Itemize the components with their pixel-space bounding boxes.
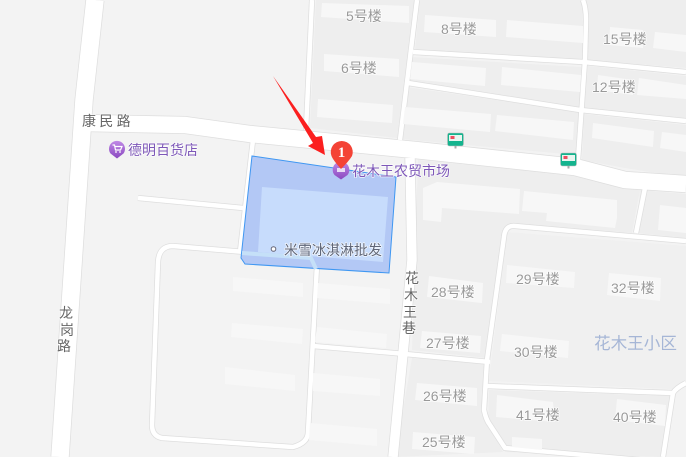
icon: shopping cart pin: [109, 141, 125, 158]
poi: 米雪冰淇淋批发: [271, 242, 382, 258]
building number labels: 12号楼: [592, 79, 636, 95]
bus stop icons: [448, 133, 576, 168]
label: 龙岗路: 路: [57, 338, 71, 354]
inner building: [258, 187, 388, 262]
highlighted market area: [241, 156, 396, 273]
building number labels: [341, 8, 657, 450]
label: 康民路: 康民路: [82, 113, 134, 129]
red location pin: [331, 141, 353, 169]
label: 龙岗路: [57, 305, 74, 354]
buildings: [225, 3, 686, 454]
building number labels: 27号楼: [426, 335, 470, 351]
pin number: 1: [338, 145, 345, 161]
label: 花木王巷: 花: [405, 270, 419, 286]
building number labels: 6号楼: [341, 60, 377, 76]
building number labels: 26号楼: [423, 388, 467, 404]
building number labels: 5号楼: [346, 8, 382, 24]
icon: bus stop 2: [560, 153, 576, 168]
road labels: [57, 113, 419, 354]
building number labels: 8号楼: [441, 21, 477, 37]
icon: bus stop 1: [448, 133, 464, 148]
poi: 德明百货店: [109, 141, 198, 158]
residential blocks: [310, 0, 686, 457]
label: 龙岗路: 龙: [59, 305, 73, 321]
building number labels: 30号楼: [514, 344, 558, 360]
neighborhood label: 花木王小区: 花木王小区: [594, 334, 677, 353]
building number labels: 25号楼: [422, 434, 466, 450]
label: 花木王巷: 木: [404, 287, 418, 303]
area polygon: [241, 156, 396, 273]
label: 花木王巷: [402, 270, 419, 336]
poi name: 德明百货店: [128, 142, 198, 158]
building number labels: 28号楼: [431, 284, 475, 300]
icon: small dot: [271, 247, 276, 251]
poi: 花木王农贸市场: [333, 162, 450, 180]
building number labels: 40号楼: [613, 409, 657, 425]
road inside area: [242, 253, 316, 269]
label: 花木王巷: 巷: [402, 320, 416, 336]
poi name: 米雪冰淇淋批发: [284, 242, 382, 258]
poi name: 花木王农贸市场: [352, 163, 450, 179]
building number labels: 29号楼: [516, 271, 560, 287]
label: 龙岗路: 岗: [60, 322, 74, 338]
building number labels: 32号楼: [611, 280, 655, 296]
building number labels: 15号楼: [603, 31, 647, 47]
red arrow: [273, 76, 325, 155]
label: 花木王巷: 王: [403, 304, 417, 320]
building number labels: 41号楼: [516, 407, 560, 423]
icon: market pin: [333, 162, 349, 180]
